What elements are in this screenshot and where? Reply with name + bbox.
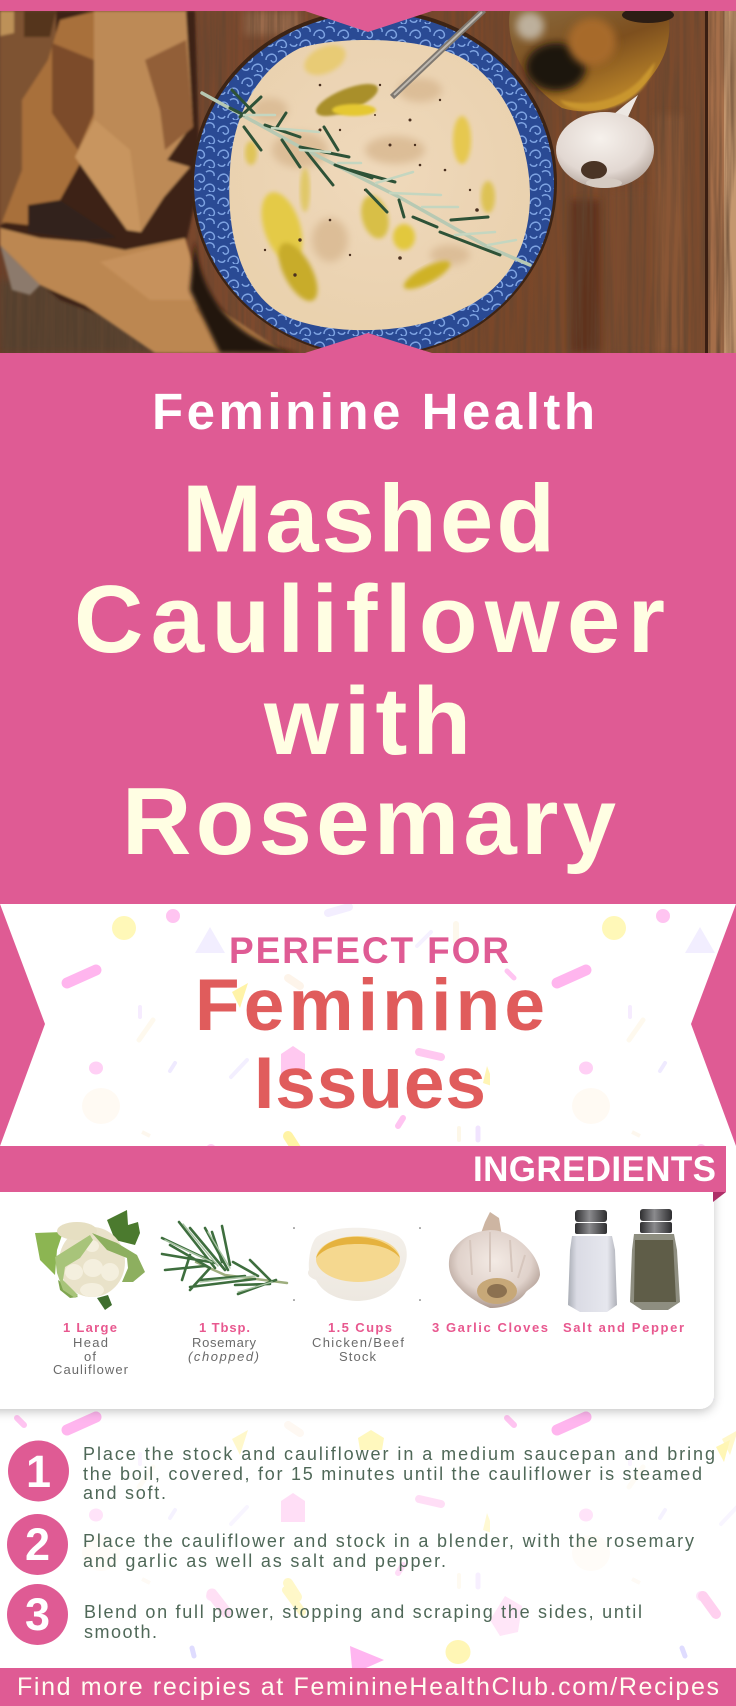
step 1 text: and soft.: [83, 1483, 166, 1503]
steps background with confetti: [0, 1146, 736, 1668]
icon: garlic bulb: [449, 1212, 540, 1308]
icon: bowl of stock: [293, 1227, 421, 1301]
cauliflower label: 1 Large: [63, 1320, 117, 1335]
stock label: Chicken/Beef: [312, 1335, 404, 1350]
bottom pink band with chevron notch: [0, 333, 736, 370]
ribbon: perfect for feminine issues: Issues: [254, 1043, 486, 1124]
ribbon text: PERFECT FOR: [229, 930, 509, 971]
cauliflower label: [53, 1320, 129, 1377]
cauliflower label: Cauliflower: [53, 1362, 129, 1377]
ingredients banner: [0, 1146, 726, 1202]
step 2 badge: [7, 1514, 68, 1575]
main title: with: [263, 668, 471, 775]
main title: Mashed: [182, 466, 555, 572]
step 2 badge: 2: [25, 1519, 50, 1570]
step 3 text: smooth.: [84, 1622, 157, 1642]
step 3 text: [84, 1602, 642, 1642]
ingredients card: [0, 1180, 714, 1409]
rosemary label: Rosemary: [192, 1335, 256, 1350]
ribbon: perfect for feminine issues: Feminine: [195, 965, 545, 1046]
rosemary label: (chopped): [188, 1349, 259, 1364]
footer band: Find more recipies at FeminineHealthClub.com/Recipes: [17, 1673, 719, 1701]
step 1 text: Place the stock and cauliflower in a medium saucepan and bring: [83, 1444, 715, 1464]
ribbon shape: [0, 904, 736, 1146]
step 3: [7, 1584, 642, 1645]
stock label: Stock: [339, 1349, 376, 1364]
salt and pepper label: Salt and Pepper: [563, 1320, 684, 1335]
step 3 text: Blend on full power, stopping and scraping the sides, until: [84, 1602, 642, 1622]
cauliflower label: Head: [73, 1335, 108, 1350]
stock label: [312, 1320, 404, 1364]
garlic label: 3 Garlic Cloves: [432, 1320, 548, 1335]
rosemary sprig: [202, 90, 530, 265]
ribbon: perfect for feminine issues: [0, 904, 736, 1146]
step 1 text: the boil, covered, for 15 minutes until the cauliflower is steamed: [83, 1464, 702, 1484]
step 1: [8, 1440, 715, 1503]
olive oil jar: [509, 7, 674, 111]
cauliflower label: of: [84, 1349, 96, 1364]
salt shaker: [568, 1210, 617, 1312]
main title: Rosemary: [122, 768, 616, 875]
subtitle: Feminine Health: Feminine Health: [152, 383, 595, 440]
step 2 text: Place the cauliflower and stock in a blender, with the rosemary: [83, 1531, 694, 1551]
step 3 badge: 3: [25, 1589, 50, 1640]
main title: Cauliflower: [74, 566, 665, 673]
spoon: [392, 10, 484, 97]
ribbon confetti: [0, 904, 736, 1146]
garlic bulb: [556, 95, 654, 188]
step 3 badge: [7, 1584, 68, 1645]
rosemary label: 1 Tbsp.: [199, 1320, 250, 1335]
pepper shaker: [630, 1209, 680, 1310]
step 1 badge: [8, 1440, 69, 1502]
rosemary label: [188, 1320, 259, 1364]
blue plate: [191, 9, 557, 357]
step 2: [7, 1514, 694, 1575]
main title: [74, 466, 665, 875]
icon: rosemary: [162, 1222, 287, 1294]
step 1 text: [83, 1444, 715, 1503]
stock label: 1.5 Cups: [328, 1320, 392, 1335]
wood table: [0, 11, 736, 353]
ingredients banner: INGREDIENTS: [473, 1150, 716, 1189]
step 2 text: [83, 1531, 694, 1571]
top pink band with chevron notch: [0, 0, 736, 32]
ingredient labels: [53, 1320, 684, 1377]
hero photo: mashed cauliflower on a blue plate: [0, 7, 736, 357]
step 1 badge: 1: [26, 1446, 51, 1497]
brown paper: [0, 11, 285, 353]
dark shadow at plate edge: [190, 240, 300, 353]
step 2 text: and garlic as well as salt and pepper.: [83, 1551, 446, 1571]
icon: salt and pepper shakers: [568, 1209, 680, 1312]
mash: [229, 39, 530, 330]
icon: cauliflower: [35, 1210, 145, 1310]
